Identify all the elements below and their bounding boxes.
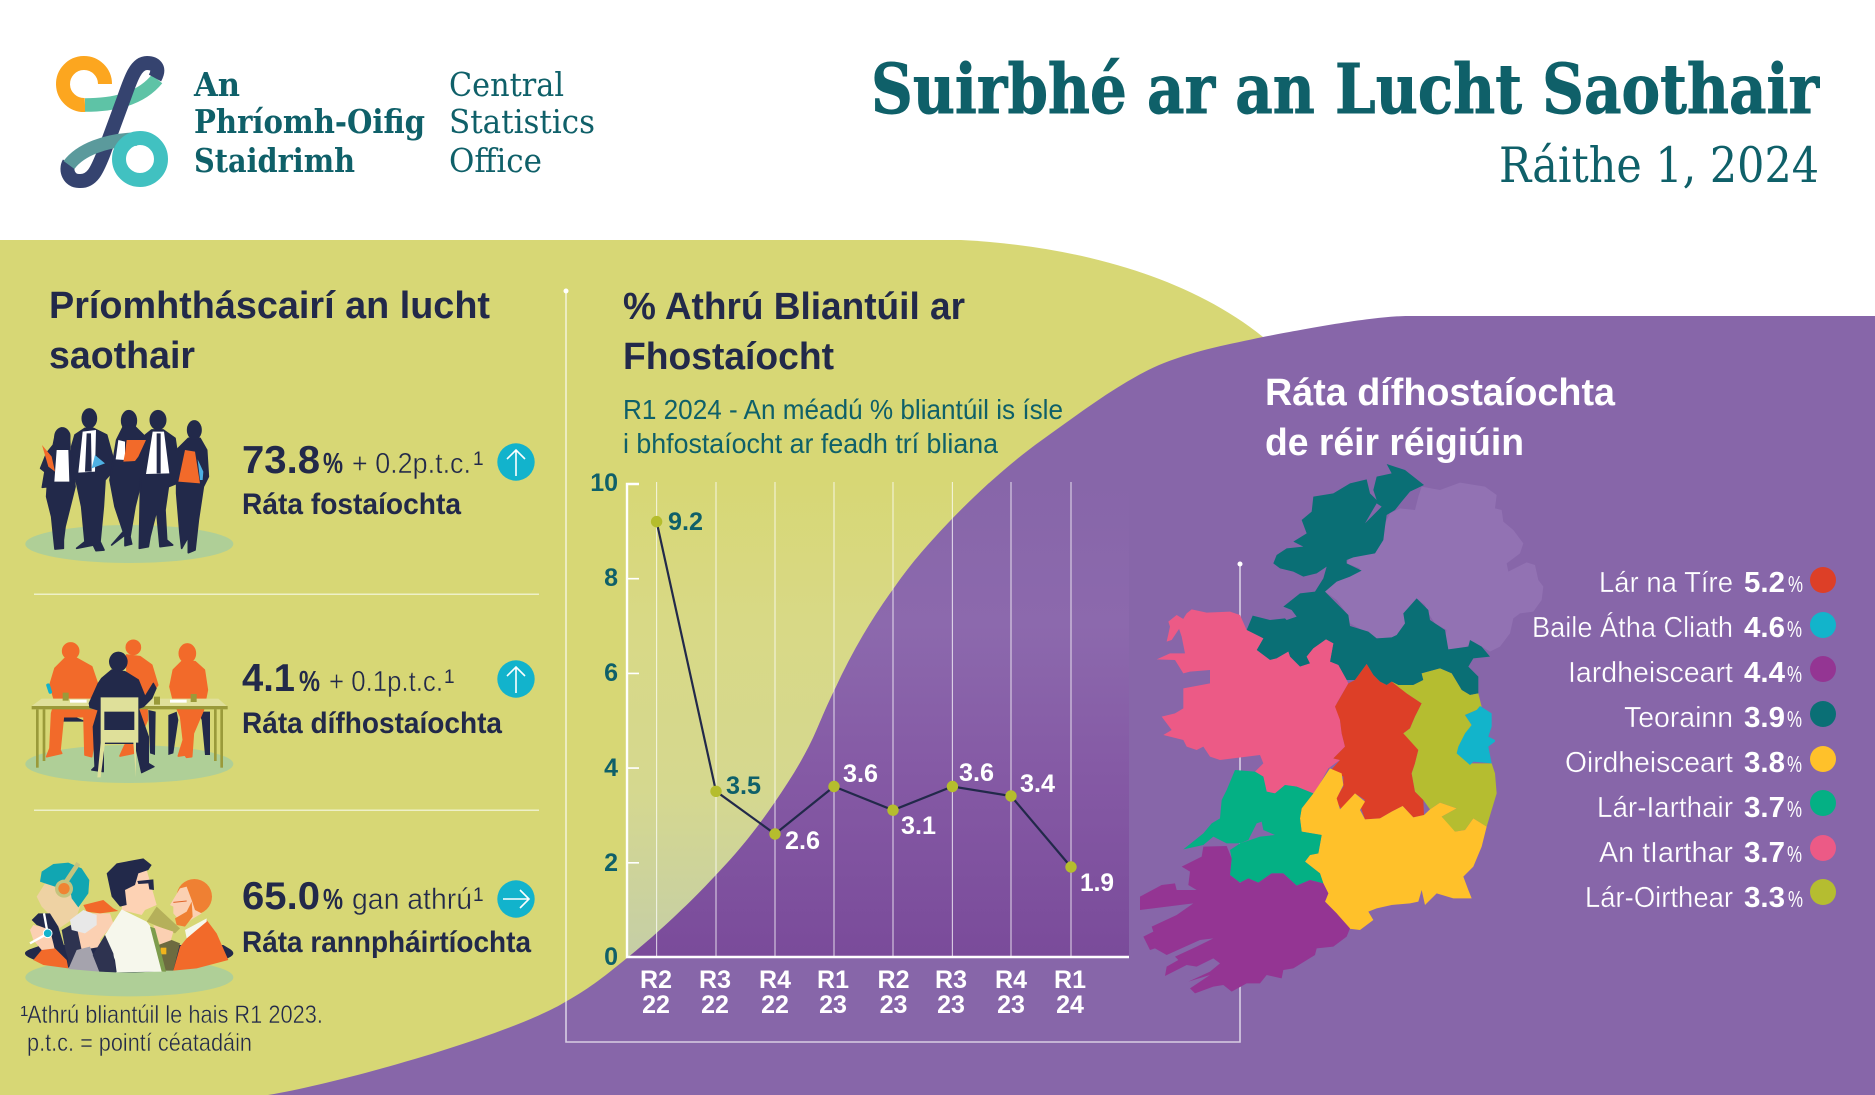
x axis labels: R2	[878, 966, 909, 994]
y axis labels: 2	[604, 849, 618, 877]
y axis labels: 4	[604, 754, 618, 782]
stat: employment rate: %	[323, 448, 343, 480]
map of Ireland	[1140, 464, 1543, 993]
legend row: Dublin: %	[1787, 616, 1802, 642]
region: Mid-East	[1392, 668, 1497, 832]
legend row: Mid-East: Lár-Oirthear	[1585, 882, 1733, 914]
divider	[34, 810, 539, 811]
legend row: Midlands: %	[1788, 571, 1803, 597]
logo: English wordmark: Statistics	[449, 102, 595, 141]
subtitle: Ráithe 1, 2024	[1499, 137, 1819, 194]
icon: right arrow	[497, 880, 535, 918]
logo: Irish wordmark: An	[193, 65, 240, 104]
legend row: Mid-West	[1597, 790, 1836, 824]
data labels: 3.6	[843, 760, 878, 788]
legend row: South-East: %	[1787, 751, 1802, 777]
x axis labels: R3	[935, 966, 967, 994]
divider	[34, 594, 539, 595]
region: Mid-West	[1183, 770, 1323, 886]
heading: key labour force indicators: saothair	[49, 335, 195, 377]
icon: up arrow	[497, 660, 535, 698]
background: yellow panel shape	[0, 240, 1263, 1095]
legend row: South-West	[1568, 656, 1836, 689]
data labels: 9.2	[668, 508, 703, 536]
legend: regional unemployment rates	[1532, 567, 1836, 914]
data line	[657, 522, 1071, 867]
x axis labels: R2	[640, 966, 672, 994]
footnote: Athrú bliantúil le hais R1 2023.	[27, 1001, 323, 1029]
stat: participation rate: 65.0	[242, 875, 320, 918]
x axis labels: 23	[997, 991, 1025, 1019]
footnote: p.t.c. = pointí céatadáin	[27, 1029, 252, 1057]
region: South-East	[1300, 768, 1487, 930]
logo: English wordmark	[449, 65, 595, 180]
x axis labels: R4	[759, 966, 791, 994]
stat: employment rate: 73.8	[242, 439, 320, 482]
x axis labels: 24	[1056, 991, 1084, 1019]
stat: unemployment rate: 1	[444, 667, 455, 688]
data labels: 3.4	[1020, 770, 1055, 798]
logo: Irish wordmark	[193, 65, 425, 180]
logo: CSO emblem	[63, 63, 161, 181]
x axis labels: R1	[1054, 966, 1086, 994]
legend row: South-East: Oirdheisceart	[1565, 747, 1733, 779]
icon: diverse workers	[25, 858, 233, 996]
stat: participation rate: 1	[473, 885, 484, 906]
stat: participation rate: Ráta rannpháirtíochta	[242, 926, 532, 959]
legend row: South-West: %	[1787, 661, 1802, 687]
legend row: Border: %	[1787, 706, 1802, 732]
x axis labels: R1	[817, 966, 849, 994]
heading: unemployment by region: de réir réigiúin	[1265, 422, 1524, 464]
x axis labels: R3	[699, 966, 731, 994]
stat: unemployment rate: + 0.1p.t.c.	[329, 666, 443, 698]
x axis labels: R4	[995, 966, 1027, 994]
legend row: Mid-East	[1585, 879, 1836, 914]
logo: English wordmark: Office	[449, 141, 542, 180]
heading: key labour force indicators	[49, 285, 490, 377]
chart backdrop on yellow	[627, 483, 1129, 957]
region: Midlands	[1332, 664, 1424, 819]
x axis labels: 22	[761, 991, 789, 1019]
stat: unemployment rate: Ráta dífhostaíochta	[242, 707, 503, 740]
heading: annual change in employment: % Athrú Bliantúil ar	[623, 286, 965, 328]
legend row: South-East	[1565, 746, 1836, 779]
y axis labels: 8	[604, 564, 618, 592]
legend row: South-West: Iardheisceart	[1568, 657, 1733, 689]
data labels: 3.5	[726, 772, 761, 800]
legend row: Midlands: Lár na Tíre	[1599, 567, 1733, 599]
chart subtitle	[623, 394, 1063, 459]
stat: employment rate: 1	[473, 449, 484, 470]
icon: interview table	[25, 640, 233, 783]
legend row: Midlands	[1599, 567, 1836, 599]
legend row: West: An tIarthar	[1599, 837, 1733, 869]
legend row: Mid-East: %	[1788, 886, 1803, 912]
data labels: 1.9	[1080, 869, 1114, 897]
footnote: 1	[20, 1003, 28, 1020]
stat: participation rate: gan athrú	[352, 883, 472, 916]
y axis labels: 6	[604, 659, 618, 687]
logo: English wordmark: Central	[449, 65, 564, 104]
region: West	[1157, 609, 1348, 793]
heading: annual change in employment: Fhostaíocht	[623, 336, 834, 378]
stat: unemployment rate: 4.1	[242, 657, 295, 700]
x axis labels: 23	[937, 991, 965, 1019]
y axis labels	[590, 469, 618, 971]
legend row: Mid-East: 3.3	[1744, 882, 1785, 914]
stat: participation rate: %	[323, 884, 343, 916]
legend row: West: %	[1787, 841, 1802, 867]
data labels: 2.6	[785, 827, 820, 855]
x axis labels: 22	[642, 991, 670, 1019]
stat: employment rate	[242, 439, 484, 521]
legend row: Mid-West: Lár-Iarthair	[1597, 792, 1733, 824]
icon: business people	[25, 409, 233, 563]
frame line around chart	[564, 288, 1242, 1042]
data labels: 3.1	[901, 812, 936, 840]
heading: unemployment by region	[1265, 372, 1616, 464]
legend row: Dublin: 4.6	[1744, 612, 1785, 644]
legend row: South-West: 4.4	[1744, 657, 1785, 689]
legend row: West: 3.7	[1744, 837, 1785, 869]
logo: Irish wordmark: Phríomh-Oifig	[194, 102, 425, 141]
background: purple panel shape	[268, 316, 1875, 1095]
line chart	[590, 469, 1129, 1019]
footnote	[20, 1001, 323, 1057]
heading: unemployment by region: Ráta dífhostaíochta	[1265, 372, 1616, 414]
legend row: Border: Teorainn	[1624, 702, 1733, 734]
stat: employment rate: + 0.2p.t.c.	[352, 448, 471, 480]
icon: up arrow	[497, 443, 535, 481]
data labels: 3.6	[959, 759, 994, 787]
stat: unemployment rate	[242, 657, 503, 740]
legend row: Dublin	[1532, 611, 1836, 644]
region: South-West	[1140, 846, 1350, 993]
legend row: Mid-West: 3.7	[1744, 792, 1785, 824]
stat: employment rate: Ráta fostaíochta	[242, 488, 462, 521]
x axis labels: 23	[880, 991, 907, 1019]
legend row: Border	[1624, 701, 1836, 734]
region: Border	[1247, 464, 1490, 695]
chart backdrop on purple	[627, 483, 1129, 957]
heading: key labour force indicators: Príomhtháscairí an lucht	[49, 285, 490, 327]
region: Northern Ireland (no data)	[1325, 483, 1543, 652]
chart subtitle: R1 2024 - An méadú % bliantúil is ísle	[623, 394, 1063, 425]
stat: unemployment rate: %	[299, 666, 320, 698]
legend row: South-East: 3.8	[1744, 747, 1785, 779]
x axis labels	[640, 966, 1086, 1019]
legend row: Mid-West: %	[1787, 796, 1802, 822]
legend row: Midlands: 5.2	[1744, 567, 1785, 599]
x axis labels: 23	[819, 991, 847, 1019]
y axis labels: 10	[590, 469, 618, 497]
chart subtitle: i bhfostaíocht ar feadh trí bliana	[623, 428, 998, 459]
stat: participation rate	[242, 875, 532, 959]
y axis labels: 0	[604, 943, 618, 971]
heading: annual change in employment	[623, 286, 965, 378]
legend row: Border: 3.9	[1744, 702, 1785, 734]
legend row: West	[1599, 835, 1836, 869]
legend row: Dublin: Baile Átha Cliath	[1532, 611, 1733, 644]
region: Dublin	[1457, 706, 1495, 765]
logo: Irish wordmark: Staidrimh	[194, 141, 355, 180]
data points	[651, 516, 1077, 873]
x axis labels: 22	[701, 991, 729, 1019]
data labels	[668, 508, 1114, 897]
